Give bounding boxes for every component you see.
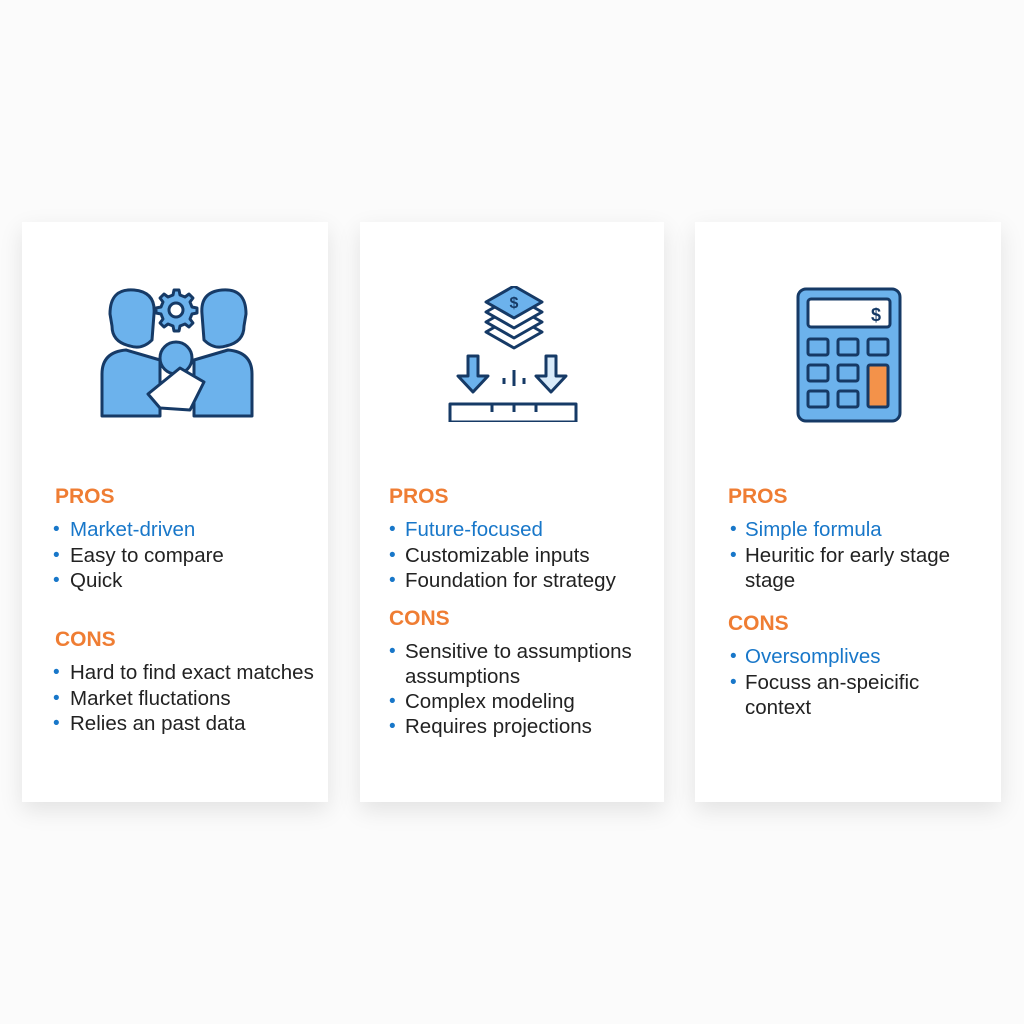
pros/cons list: Focuss an-speicific bbox=[745, 671, 919, 694]
pros/cons list: Sensitive to assumptions bbox=[405, 640, 632, 663]
pros/cons list: • bbox=[730, 519, 737, 540]
pros/cons list: Customizable inputs bbox=[405, 544, 590, 567]
pros/cons list: • bbox=[730, 672, 737, 693]
pros/cons list: • bbox=[389, 545, 396, 566]
pros/cons list: stage bbox=[745, 569, 795, 592]
pros list bbox=[53, 518, 314, 735]
pros list: Quick bbox=[70, 569, 122, 592]
pros/cons list: • bbox=[389, 716, 396, 737]
pros list: • bbox=[53, 688, 60, 709]
pros list: Market fluctations bbox=[70, 687, 231, 710]
cons heading: CONS bbox=[55, 628, 116, 651]
icon: calculator bbox=[796, 288, 902, 422]
icon: calculator: $ bbox=[871, 305, 881, 325]
cons heading: CONS bbox=[728, 612, 789, 635]
pros/cons list bbox=[389, 518, 632, 738]
card 3: rule of thumb bbox=[695, 222, 1001, 802]
pros list: Market-driven bbox=[70, 518, 195, 541]
pros list: Easy to compare bbox=[70, 544, 224, 567]
pros/cons list: • bbox=[389, 641, 396, 662]
pros/cons list: • bbox=[730, 646, 737, 667]
card 2: DCF bbox=[360, 222, 664, 802]
pros list: • bbox=[53, 545, 60, 566]
pros heading: PROS bbox=[389, 485, 449, 508]
pros/cons list: Requires projections bbox=[405, 715, 592, 738]
pros/cons list: context bbox=[745, 696, 811, 719]
pros/cons list: • bbox=[389, 519, 396, 540]
pros heading: PROS bbox=[728, 485, 788, 508]
icon: money stack with arrows: $ bbox=[510, 295, 519, 312]
pros list: Hard to find exact matches bbox=[70, 661, 314, 684]
pros/cons list: • bbox=[730, 545, 737, 566]
pros/cons list bbox=[728, 518, 950, 719]
pros list: Relies an past data bbox=[70, 712, 246, 735]
pros list: • bbox=[53, 713, 60, 734]
pros list: • bbox=[53, 662, 60, 683]
pros/cons list: Oversomplives bbox=[745, 645, 881, 668]
pros/cons list: Future-focused bbox=[405, 518, 543, 541]
pros/cons list: • bbox=[389, 691, 396, 712]
pros list: • bbox=[53, 519, 60, 540]
card 1: comparables bbox=[22, 222, 328, 802]
pros heading: PROS bbox=[55, 485, 115, 508]
pros list: • bbox=[53, 570, 60, 591]
pros/cons list: assumptions bbox=[405, 665, 520, 688]
pros/cons list: Simple formula bbox=[745, 518, 882, 541]
pros/cons list: Complex modeling bbox=[405, 690, 575, 713]
pros/cons list: Heuritic for early stage bbox=[745, 544, 950, 567]
pros/cons list: • bbox=[389, 570, 396, 591]
icon: money stack with arrows bbox=[448, 286, 578, 422]
cons heading: CONS bbox=[389, 607, 450, 630]
icon: people handshake bbox=[100, 288, 254, 418]
pros/cons list: Foundation for strategy bbox=[405, 569, 616, 592]
